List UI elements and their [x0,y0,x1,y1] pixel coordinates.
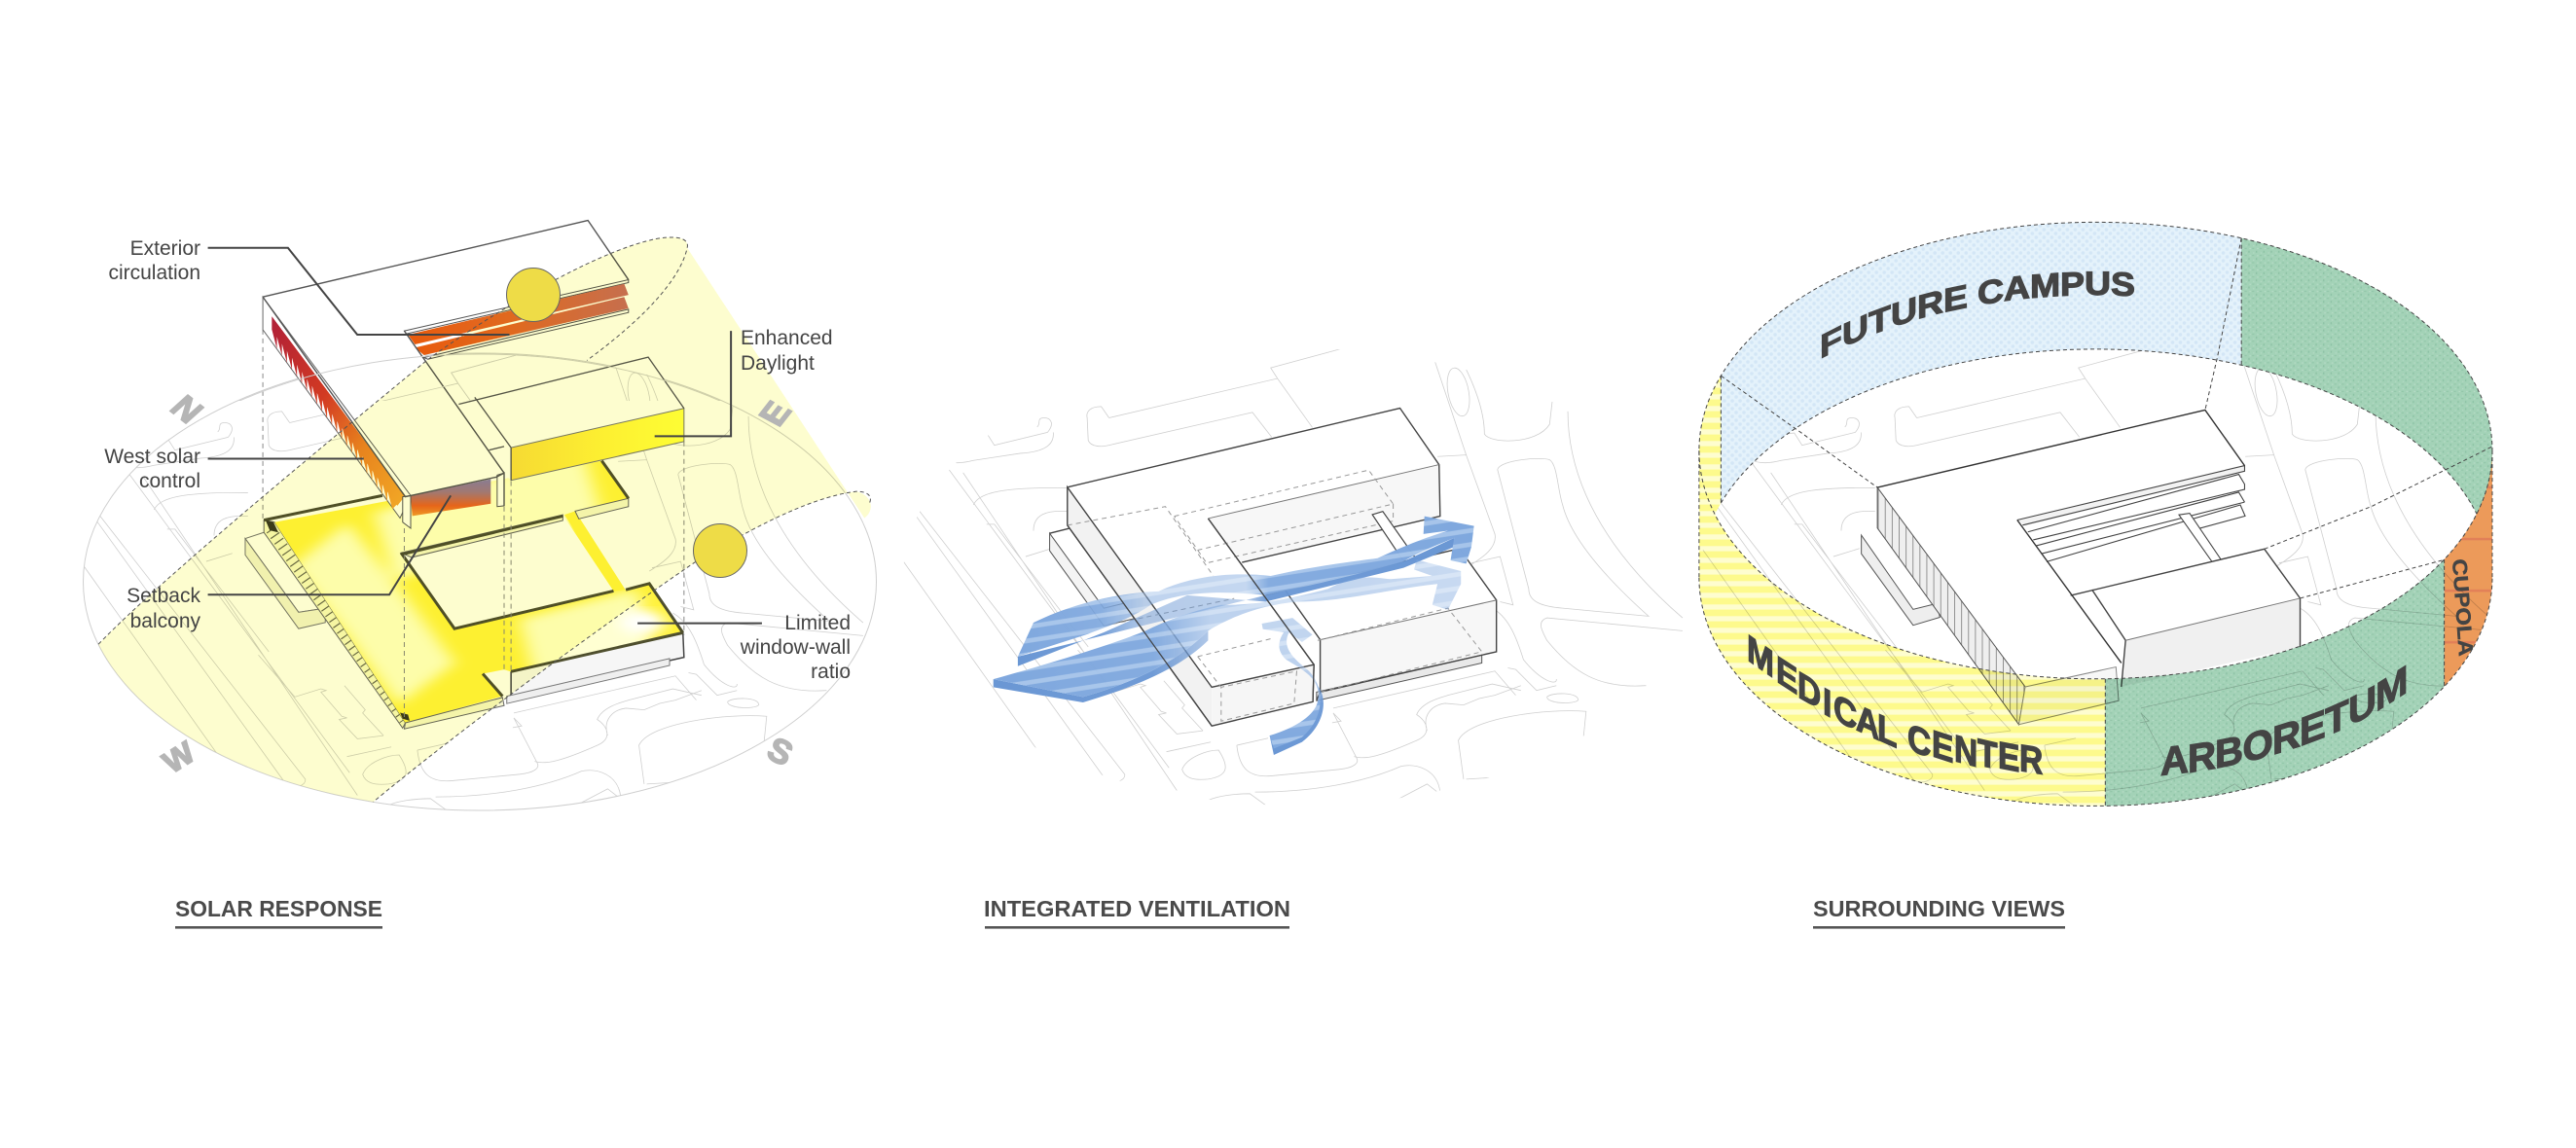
sunlight band [98,237,871,802]
upper roof volume [263,221,629,495]
wall text: arboretum: B [2215,727,2243,777]
east block [458,357,684,481]
wall text: arboretum: A [2160,735,2189,784]
saw-tooth west edge of floor plate [264,520,406,728]
wall: back arboretum [2241,238,2492,514]
wall text: arboretum: O [2242,719,2273,771]
interior dashed floors [1068,470,1394,721]
wall text: future campus: U [1842,306,1869,355]
wall text: future campus: M [2030,266,2060,305]
wall text: future campus: S [2111,266,2135,304]
site plan: views [1703,348,2490,808]
view cylinder walls [1699,222,2492,806]
wall: arboretum [2105,559,2445,806]
wall text: medical center: E [1932,721,1953,771]
wall text: future campus: U [2085,266,2111,303]
exterior circulation bands [404,280,629,359]
dark wall ends [266,520,410,721]
building massing [1862,410,2301,725]
compass letters: E [751,396,799,432]
airflow ribbon: rising [1262,618,1324,755]
terrace bars [2017,466,2245,568]
wall text: future campus: C [1977,270,2004,312]
wall text: medical center: C [1907,715,1931,767]
wall text: future campus: U [1891,289,1917,335]
north wing face [1208,465,1440,562]
wall text: future campus [1820,266,2135,367]
airflow ribbon: upper [1018,517,1474,666]
compass letters: N [163,389,210,430]
wall text: arboretum: T [2325,692,2349,746]
wall text: future campus: P [2060,266,2085,304]
label: limited window-wall ratio: ratio [811,661,851,683]
podium and main outlines [1050,409,1440,726]
wall text: arboretum: E [2300,700,2326,755]
roof legs [403,473,504,528]
rim and view-corridor dashes [1699,222,2492,806]
label: enhanced daylight: Enhanced [741,327,833,349]
roof [1877,410,2244,687]
wall text: medical center: E [1998,734,2019,780]
bridge [1372,512,1416,561]
label: exterior circulation: Exterior [130,237,200,260]
site plan: ventilation [895,348,1683,808]
floor plate with daylight glow and courtyard opening [274,461,683,729]
roof outlines [263,221,629,506]
sun: lower [693,523,747,578]
panel: integrated ventilation [895,348,1683,808]
wall text: medical center: E [1776,647,1797,703]
label: west solar control: West solar [104,446,200,468]
label: setback balcony: balcony [130,610,200,632]
wall: future campus [1721,222,2241,503]
west podium [1050,528,1150,608]
main outlines [1877,410,2244,663]
roof [1068,409,1439,687]
compass letters: S [761,730,799,773]
building massing [994,409,1497,755]
leader lines [208,248,762,624]
lower face of east wing [511,632,684,697]
east block [1286,549,1497,640]
building edge over airflow [1068,519,1314,726]
wall text: future campus: E [1943,277,1968,320]
podium [1862,530,1938,609]
site boundary ellipse [84,353,876,810]
projection dashes [263,330,684,719]
label: limited window-wall ratio: Limited [784,612,851,634]
wall text: future campus: T [1869,298,1891,343]
compass letters [157,389,799,780]
west face [1068,487,1212,726]
lower podium block [245,532,325,612]
louvered west face [1877,487,2025,725]
wall text: future campus: A [2004,269,2030,308]
setback balcony [411,480,490,516]
courtyard bridge [564,511,626,591]
wall text: arboretum: R [2188,733,2216,781]
title: surrounding views: SURROUNDING VIEWS [1813,896,2065,921]
label: west solar control: control [139,470,200,492]
site plan: solar response [76,353,863,813]
wall text: arboretum: U [2348,677,2376,735]
label: exterior circulation: circulation [108,262,200,284]
title: solar response: SOLAR RESPONSE [175,896,382,921]
compass letters: W [157,735,201,780]
wall text: arboretum [2160,657,2408,784]
wall text: medical center: A [1856,697,1879,750]
label: limited window-wall ratio: window-wall [740,636,851,659]
exploded massing diagram [245,221,684,729]
title: integrated ventilation: INTEGRATED VENTILATION [984,896,1290,921]
wall text: future campus: F [1820,318,1842,367]
south face [2018,667,2119,725]
wall text: medical center: T [1977,731,1998,777]
wall text: medical center: C [1833,685,1857,739]
wall: cupola [2445,450,2492,687]
wall text: medical center: I [1823,680,1832,727]
south face [1212,664,1314,726]
wall text: medical center: D [1797,664,1821,719]
wall text: medical center: R [2019,736,2043,782]
panel: solar response [76,221,876,813]
label: setback balcony: Setback [127,585,200,607]
floor plate heavy outlines [264,461,683,697]
east block [2092,549,2301,640]
airflow ribbon: lower [994,559,1461,702]
wall text: medical center: M [1747,627,1774,687]
wall text: medical center: N [1954,727,1977,775]
wall text: future campus: R [1917,282,1943,326]
wall text: medical center [1747,627,2043,782]
label: enhanced daylight: Daylight [741,352,815,375]
wall text: arboretum: R [2272,709,2301,764]
west face with louvers [263,297,411,519]
wall text: arboretum: M [2376,657,2408,721]
site lines showing over the upper roof [239,354,720,401]
wall text: medical center: L [1877,706,1897,757]
wall text: cupola: CUPOLA [2448,558,2478,657]
sun: upper [506,269,561,321]
wall: medical center [1699,376,2105,806]
panel: surrounding views [1699,222,2492,808]
bridge [2179,514,2221,561]
